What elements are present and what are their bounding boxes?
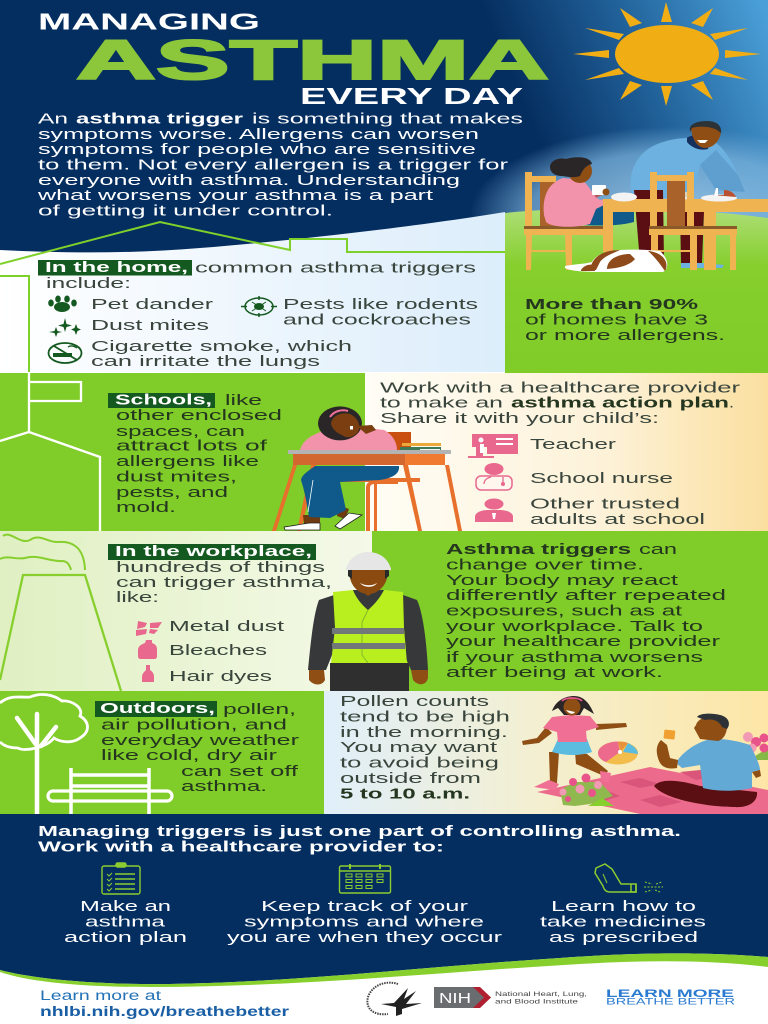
callout: more than 90 percent: or more allergens. xyxy=(525,327,725,344)
illustration: picnic with child and father xyxy=(522,696,768,814)
man pants xyxy=(654,781,757,807)
panel: grass hill xyxy=(505,208,768,373)
panel: outdoors xyxy=(0,691,324,814)
panel: action plan xyxy=(365,373,768,531)
label: in the home xyxy=(38,259,192,276)
text: bleaches: Bleaches xyxy=(169,642,267,659)
man head xyxy=(694,716,727,741)
text: make an asthma action plan xyxy=(64,898,187,946)
text: triggers can change: your healthcare provider xyxy=(446,633,720,650)
text: pests: and cockroaches xyxy=(283,312,471,328)
text: pollen counts: outside from xyxy=(340,770,481,787)
text: cigarette smoke xyxy=(91,338,352,370)
text: pollen counts: tend to be high xyxy=(340,708,510,726)
logo: NIH: and Blood Institute xyxy=(495,998,579,1006)
girl skirt xyxy=(552,739,592,755)
icon: paw xyxy=(48,296,77,312)
icon: no smoking xyxy=(48,343,82,363)
text: schools description: attract lots of xyxy=(116,438,268,454)
text: dust mites: Dust mites xyxy=(91,317,209,334)
text: make an asthma action plan: asthma xyxy=(85,914,166,930)
logo: NIH xyxy=(434,987,587,1008)
books xyxy=(402,443,441,446)
callout: more than 90 percent: More than 90% xyxy=(525,296,698,313)
illustration: family at table xyxy=(524,121,768,272)
text: triggers can change: exposures, such as at xyxy=(446,602,683,620)
text: other trusted adults: Other trusted xyxy=(530,496,680,512)
desk xyxy=(293,454,445,465)
text: action plan: Share it with your child’s: xyxy=(380,410,659,427)
text: triggers can change: if your asthma worsens xyxy=(446,649,703,666)
text: schools description: dust mites, xyxy=(116,468,237,486)
text: other trusted adults xyxy=(530,496,705,528)
man shirt xyxy=(676,739,760,791)
text: triggers can change: change over time. xyxy=(446,556,644,574)
text: school nurse: School nurse xyxy=(530,470,673,487)
text: learn how: Learn how to xyxy=(551,898,696,915)
panel: in the workplace xyxy=(0,531,372,691)
text: pollen counts xyxy=(340,693,510,802)
label: outdoors xyxy=(95,700,217,717)
label: in the home: In the home, xyxy=(45,259,188,276)
text: hair dyes: Hair dyes xyxy=(169,668,272,685)
panel: learn more xyxy=(40,988,290,1019)
girl legs xyxy=(549,752,608,783)
text block: asthma trigger intro: of getting it under control. xyxy=(38,202,333,220)
logo: learn more breathe better xyxy=(606,988,736,1006)
logo: learn more breathe better: BREATHE BETTER xyxy=(606,996,736,1006)
text: learn how: take medicines xyxy=(540,914,706,930)
text: triggers can change: after being at work. xyxy=(446,664,663,681)
text: pollen counts: to avoid being xyxy=(340,754,499,772)
title: ASTHMA xyxy=(76,28,549,91)
text: outdoors description xyxy=(101,701,299,795)
beach ball xyxy=(598,742,638,764)
text block: asthma trigger intro: asthma trigger xyxy=(76,110,243,128)
neck xyxy=(353,590,384,610)
icon: clipboard checklist xyxy=(102,863,140,894)
text block: asthma trigger intro: is something that makes xyxy=(252,110,523,128)
panel: pollen counts xyxy=(324,691,768,814)
text: pests xyxy=(283,296,478,328)
man xyxy=(631,138,745,198)
blanket xyxy=(537,767,768,814)
text: outdoors description: everyday weather xyxy=(101,732,299,749)
logo: learn more breathe better: LEARN MORE xyxy=(606,988,734,1000)
title: MANAGING xyxy=(38,8,260,34)
heading: managing triggers: Managing triggers is just one part of controlling asthma. xyxy=(38,823,681,840)
text block: asthma trigger intro: what worsens your asthma is a part xyxy=(36,187,434,204)
text: triggers can change: can xyxy=(639,541,677,558)
right flowers xyxy=(743,732,768,760)
vest xyxy=(331,590,368,663)
text: schools description: spaces, can xyxy=(116,423,245,440)
text: pollen counts: You may want xyxy=(340,739,498,756)
text: action plan xyxy=(380,380,740,427)
icon: sun xyxy=(573,2,761,106)
panel: in the home xyxy=(0,212,505,372)
text: make an asthma action plan: action plan xyxy=(64,929,187,946)
heading: managing triggers xyxy=(38,823,681,856)
girl head xyxy=(552,696,594,715)
text: action plan: asthma action plan xyxy=(511,394,729,412)
text: outdoors description: asthma. xyxy=(181,778,267,795)
text block: asthma trigger intro: symptoms worse. Allergens can worsen xyxy=(38,126,479,143)
text: other trusted adults: adults at school xyxy=(530,511,705,528)
flowers xyxy=(560,774,614,806)
label: schools xyxy=(108,392,215,408)
panel: triggers can change xyxy=(372,531,768,691)
logo: NIH: National Heart, Lung, xyxy=(495,991,587,998)
ankles xyxy=(303,505,349,524)
heading: managing triggers: Work with a healthcare provider to: xyxy=(38,838,444,856)
jacket xyxy=(308,595,428,670)
head xyxy=(318,406,362,440)
text: schools description: mold. xyxy=(116,499,176,516)
icon: metal dust xyxy=(136,621,162,636)
text block: asthma trigger intro xyxy=(36,110,523,220)
logo: HHS xyxy=(367,983,422,1016)
head xyxy=(350,570,387,594)
text: triggers can change: Your body may react xyxy=(446,572,679,589)
logo: NIH: NIH xyxy=(439,990,471,1007)
text: keep track xyxy=(227,898,502,946)
text: schools description: like xyxy=(225,392,262,409)
text: pollen counts: Pollen counts xyxy=(340,693,489,710)
text: schools description xyxy=(116,392,282,516)
desk legs xyxy=(272,465,462,531)
text: pollen counts: 5 to 10 a.m. xyxy=(340,786,470,802)
text: workplace description: can trigger asthma, xyxy=(116,574,332,591)
label: schools: Schools, xyxy=(115,392,212,408)
text: make an asthma action plan: Make an xyxy=(80,898,171,915)
sweater xyxy=(300,428,397,450)
text: outdoors description: air pollution, and xyxy=(101,716,287,734)
text: action plan: Work with a healthcare provider xyxy=(380,380,740,396)
text: outdoors description: pollen, xyxy=(223,701,296,718)
text: common asthma triggers include xyxy=(46,260,476,292)
icon: dust sparkles xyxy=(49,318,81,337)
label: in the workplace xyxy=(108,543,316,560)
text: schools description: allergens like xyxy=(116,453,259,470)
callout: more than 90 percent: of homes have 3 xyxy=(525,312,708,328)
panel: provider footer xyxy=(0,814,768,984)
text: metal dust: Metal dust xyxy=(169,618,285,635)
title: EVERY DAY xyxy=(300,83,524,109)
icon: teacher xyxy=(468,434,518,458)
text: outdoors description: can set off xyxy=(181,763,299,780)
icon: tree xyxy=(0,694,88,814)
text: triggers can change: Asthma triggers xyxy=(446,541,631,558)
icon: calendar xyxy=(340,864,390,893)
panel: header background xyxy=(0,0,768,262)
text: schools description: pests, and xyxy=(116,484,228,501)
text: schools description: other enclosed xyxy=(116,407,282,424)
icon: bench xyxy=(48,768,172,814)
dog xyxy=(565,250,667,272)
girl xyxy=(580,203,634,226)
icon: school nurse xyxy=(476,463,512,490)
panel: schools xyxy=(0,373,365,531)
text: learn how xyxy=(540,898,706,946)
shoes xyxy=(284,523,320,530)
jeans xyxy=(301,466,399,518)
title xyxy=(38,8,549,109)
text: keep track: Keep track of your xyxy=(261,898,468,915)
icon: hair dye bottle xyxy=(142,665,154,682)
text: workplace description: hundreds of things xyxy=(116,559,325,576)
text: workplace description: like: xyxy=(116,589,159,606)
right chair xyxy=(650,172,694,228)
table xyxy=(603,199,768,212)
panel: learn more: Learn more at xyxy=(40,988,161,1003)
text: common asthma triggers include: include: xyxy=(46,275,131,292)
girl shirt xyxy=(543,715,599,742)
hard hat xyxy=(346,552,391,570)
icon: inhaler xyxy=(595,864,663,892)
label: outdoors: Outdoors, xyxy=(100,700,215,717)
callout: more than 90 percent xyxy=(525,296,725,344)
icon: pest target xyxy=(241,296,277,317)
decorative green wave xyxy=(0,953,768,987)
text: common asthma triggers include: common asthma triggers xyxy=(195,260,476,276)
text: triggers can change: your workplace. Talk to xyxy=(446,618,703,635)
text: action plan: . xyxy=(729,394,734,412)
text: keep track: you are when they occur xyxy=(227,929,502,946)
left chair xyxy=(525,172,532,228)
text block: asthma trigger intro: to them. Not every allergen is a trigger for xyxy=(38,156,508,174)
hands xyxy=(309,670,428,684)
text block: asthma trigger intro: symptoms for people who are sensitive xyxy=(38,141,476,158)
text: outdoors description: like cold, dry air xyxy=(101,747,277,764)
girl arms xyxy=(522,723,627,745)
panel: learn more: nhlbi.nih.gov/breathebetter xyxy=(40,1004,290,1019)
text: teacher: Teacher xyxy=(530,436,616,453)
text: pests: Pests like rodents xyxy=(283,296,478,313)
text: pet dander: Pet dander xyxy=(91,296,213,313)
text: cigarette smoke: Cigarette smoke, which xyxy=(91,338,352,355)
label: in the workplace: In the workplace, xyxy=(115,543,312,560)
icon: trusted adult xyxy=(475,498,513,522)
chair xyxy=(383,432,411,451)
text: cigarette smoke: can irritate the lungs xyxy=(91,353,320,370)
text: keep track: symptoms and where xyxy=(244,914,484,930)
illustration: student at desk xyxy=(272,406,462,531)
text: workplace description xyxy=(116,559,332,606)
text: learn how: as prescribed xyxy=(549,929,698,946)
text: pollen counts: in the morning. xyxy=(340,724,508,741)
illustration: construction worker xyxy=(308,552,428,691)
text: action plan: to make an xyxy=(380,394,503,412)
text block: asthma trigger intro: everyone with asthma. Understanding xyxy=(38,172,460,189)
text: triggers can change xyxy=(446,541,726,681)
text block: asthma trigger intro: An xyxy=(38,110,68,128)
text: triggers can change: differently after repeated xyxy=(446,587,726,604)
pants xyxy=(330,663,409,691)
icon: bleach bottle xyxy=(138,640,157,659)
